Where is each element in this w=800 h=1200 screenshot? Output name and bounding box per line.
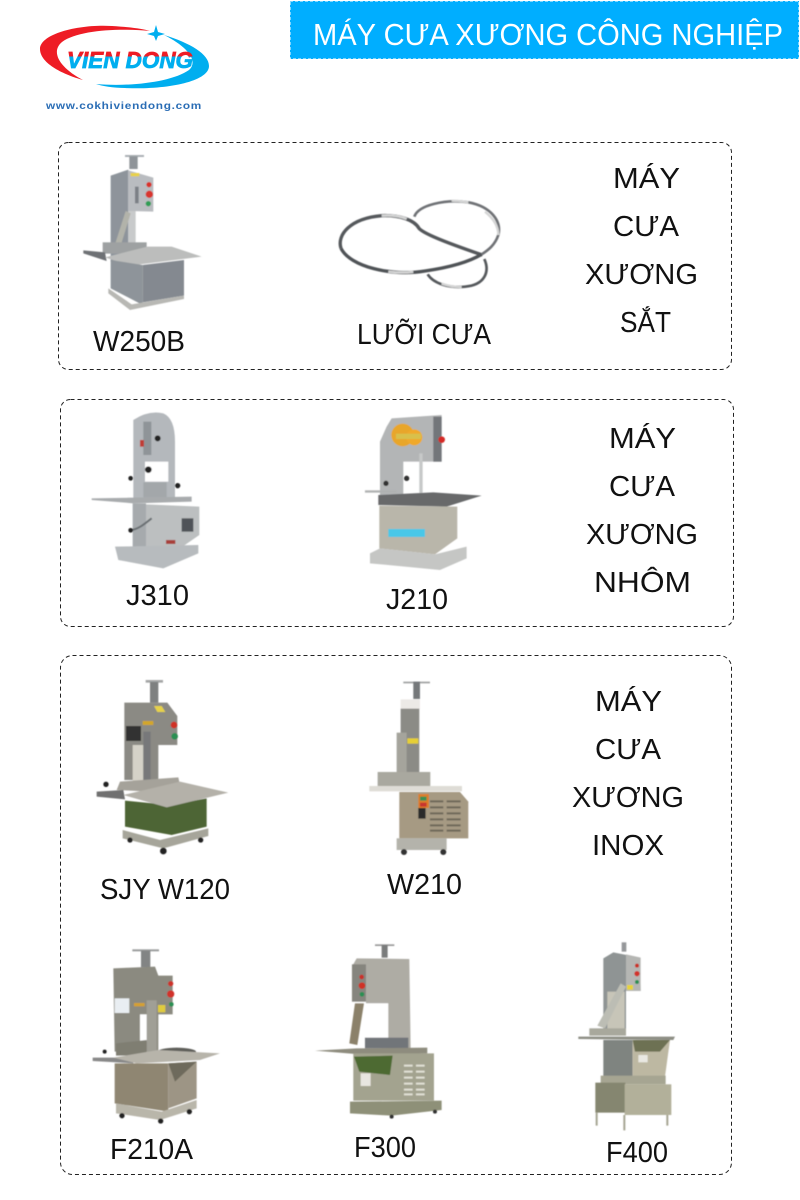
category heading: stainless: XƯƠNG — [572, 782, 684, 814]
category heading: aluminium: XƯƠNG — [586, 519, 698, 551]
category heading: aluminium: CƯA — [609, 471, 676, 503]
machines F210A and F300 — [93, 944, 442, 1124]
logo star — [147, 25, 165, 41]
machine J310 — [92, 412, 199, 568]
label W210: W210 — [387, 869, 462, 901]
title text: MÁY CƯA XƯƠNG CÔNG NGHIỆP — [313, 17, 783, 52]
machine F400 — [578, 942, 675, 1130]
category heading: stainless: INOX — [592, 830, 664, 862]
category heading: aluminium: NHÔM — [594, 565, 691, 599]
machine W210 — [369, 682, 468, 855]
label F400: F400 — [606, 1137, 668, 1169]
label F210A: F210A — [110, 1134, 194, 1166]
panel: iron bone saws — [58, 142, 732, 370]
machine SJY W120 — [97, 680, 228, 854]
machines J310 and J210 — [92, 412, 482, 570]
label saw blade: LƯỠI CƯA — [357, 317, 492, 351]
category heading: iron: CƯA — [613, 211, 680, 243]
machine J210 — [365, 415, 482, 570]
category heading: aluminium — [586, 422, 698, 599]
logo blue swoosh — [96, 35, 209, 88]
machine F210A — [93, 949, 220, 1124]
saw blade — [340, 201, 499, 287]
category heading: stainless — [572, 685, 684, 862]
logo red swoosh — [40, 26, 150, 80]
category heading: stainless: CƯA — [595, 734, 662, 766]
machine F300 — [315, 944, 442, 1119]
category heading: stainless: MÁY — [595, 685, 662, 718]
logo website: www.cokhiviendong.com — [45, 101, 202, 112]
category heading: aluminium: MÁY — [609, 422, 676, 455]
panel: stainless bone saws — [60, 656, 732, 1174]
category heading: iron: XƯƠNG — [585, 259, 698, 291]
logo: Vien Dong — [40, 25, 209, 112]
category heading: iron: MÁY — [613, 162, 680, 195]
label J210: J210 — [386, 584, 448, 616]
logo wordmark: VIEN DONG — [67, 47, 193, 73]
panel: aluminium bone saws — [60, 400, 734, 626]
category heading: iron — [585, 162, 698, 339]
label F300: F300 — [354, 1132, 416, 1164]
label SJY W120: SJY W120 — [100, 874, 230, 906]
label W250B: W250B — [93, 326, 185, 358]
machines SJY W120 and W210 — [97, 680, 468, 855]
title banner — [290, 1, 799, 59]
category heading: iron: SẮT — [620, 305, 671, 339]
machine W250B — [83, 155, 202, 310]
label J310: J310 — [126, 580, 189, 612]
